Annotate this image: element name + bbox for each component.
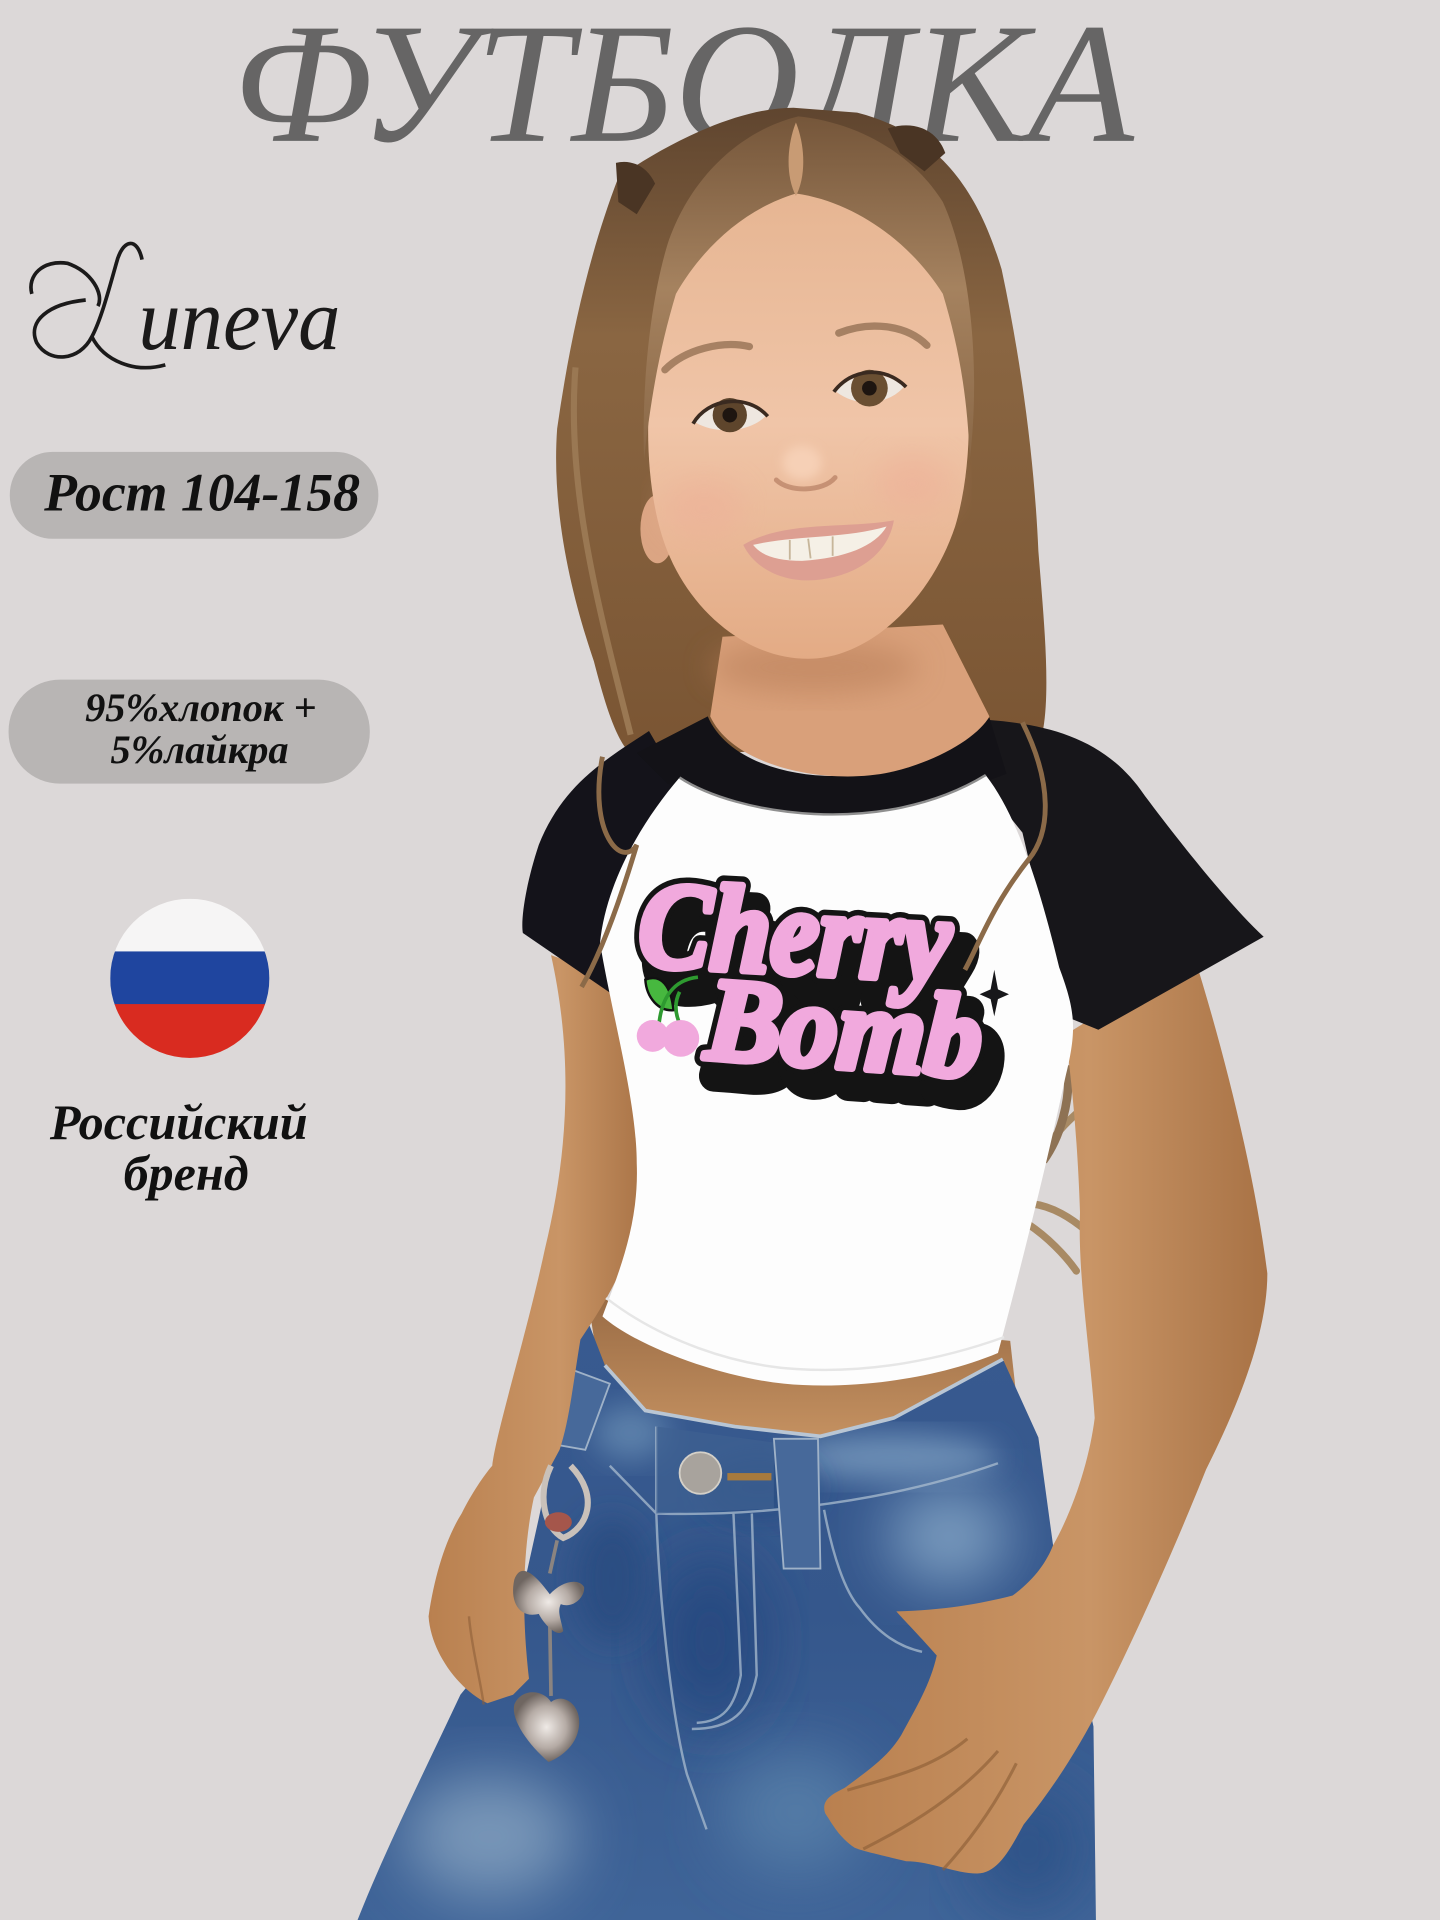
print outline: Cherry xyxy=(636,857,955,1008)
fabric composition badge: 95%хлопок + xyxy=(85,685,317,730)
bow xyxy=(513,1571,584,1633)
print outline xyxy=(636,857,986,1103)
print lettering xyxy=(636,857,986,1103)
belt loops xyxy=(557,1367,820,1569)
print lettering: Cherry xyxy=(636,857,955,1008)
button xyxy=(680,1452,771,1494)
back hair xyxy=(556,108,1097,1271)
keychain charm xyxy=(513,1466,588,1762)
heart xyxy=(514,1692,579,1762)
print lettering: Bomb xyxy=(701,954,986,1103)
right eye xyxy=(834,370,906,407)
icon: Russian flag xyxy=(110,899,269,1058)
brand origin text: Российский xyxy=(49,1094,308,1150)
height badge: Рост 104-158 xyxy=(43,463,360,523)
eyebrows xyxy=(665,326,927,370)
nose xyxy=(776,446,835,489)
print shadow: Bomb xyxy=(712,972,997,1121)
shirt sleeves and collar xyxy=(522,716,1264,1030)
brand origin text: бренд xyxy=(124,1145,249,1201)
icon: sparkle xyxy=(980,970,1009,1016)
neck xyxy=(710,624,989,776)
bangs xyxy=(644,116,974,459)
hair strands over shirt xyxy=(582,722,1045,987)
belly xyxy=(588,1298,1016,1451)
logo: Luneva: uneva xyxy=(138,271,340,369)
left arm and hand xyxy=(429,955,648,1704)
fabric composition badge xyxy=(9,680,370,784)
cheeks xyxy=(665,479,743,538)
print shadow: Cherry xyxy=(649,880,969,1031)
head xyxy=(640,116,974,659)
left eye xyxy=(693,398,768,432)
print shadow xyxy=(649,880,997,1121)
mouth xyxy=(743,520,894,580)
jeans xyxy=(358,1311,1096,1920)
figure: girl in t-shirt xyxy=(358,108,1267,1920)
right arm and hand xyxy=(824,955,1267,1873)
cherries and leaf xyxy=(637,977,699,1057)
brand origin text xyxy=(49,1094,308,1201)
shirt body xyxy=(600,775,1073,1386)
fabric composition badge: 5%лайкра xyxy=(111,727,289,772)
print: Cherry Bomb xyxy=(636,857,1009,1121)
height badge xyxy=(10,452,378,539)
print outline: Bomb xyxy=(701,954,986,1103)
logo: Luneva xyxy=(31,243,340,369)
